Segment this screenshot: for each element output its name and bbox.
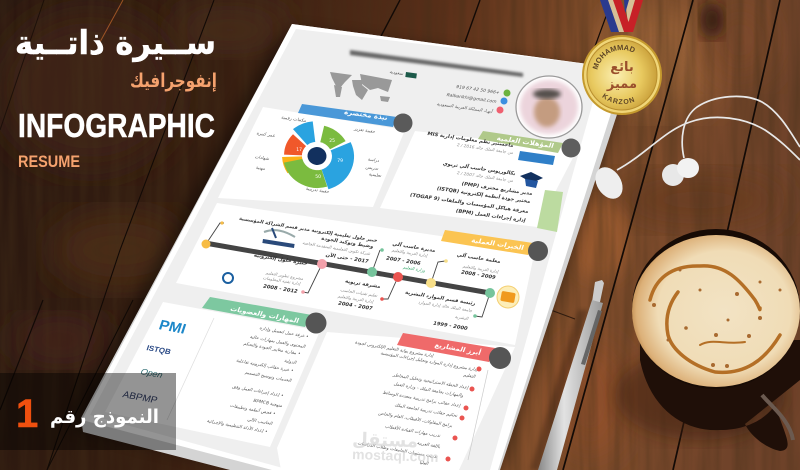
- contact rows: [436, 84, 510, 115]
- logo: ABPMP: ABPMP: [121, 390, 159, 406]
- donut labels: تدريس: [365, 165, 380, 172]
- project list: [354, 340, 478, 467]
- tab: certificates: [537, 190, 563, 232]
- donut labels: تعليمية: [368, 172, 383, 179]
- skills list: • إعداد الأدلة التنظيمية والإجرائية: [206, 417, 269, 435]
- watermark: مستقل: [352, 429, 418, 452]
- watermark: mostaql.com: [352, 446, 439, 465]
- panel: brief summary: 25: [329, 138, 335, 144]
- heading band: skills: [202, 297, 312, 327]
- project list: إدارة مشروع إدارة الموارد وتحليل إجراءات المؤسسة: [379, 351, 478, 373]
- project bullets: [446, 366, 488, 462]
- donut labels: عمر كبيرة: [256, 131, 277, 139]
- heading band: experience: [441, 230, 533, 255]
- panel: work experience: وضبط وتوكيد الجودة: [320, 236, 374, 250]
- panel: work experience: جامعة الملك خالد إدارة الموارد: [417, 300, 474, 314]
- pen: [530, 280, 604, 470]
- panel: brief summary: نبذة مختصرة: [343, 108, 389, 122]
- heading band: brief: [298, 104, 397, 127]
- panel: work experience: 2006 - 2007: [385, 256, 422, 267]
- medal: KARZON: [602, 93, 634, 104]
- contact rows: +966 50 42 67 919: [455, 84, 501, 96]
- panel: qualifications: معرفة هياكل المؤسسات والملفات (TOGAF 9): [409, 193, 529, 215]
- project list: إعداد الخطة الاستراتيجية وتحليل المخاطر: [391, 373, 469, 391]
- skills list: • إعداد إجراءات العمل وفق: [231, 385, 284, 399]
- panel: work experience: 2017 - حتى الآن: [325, 251, 371, 265]
- panel: work experience: الخبرات العملية: [470, 237, 525, 252]
- panel: qualifications: ماجستير نظم معلومات إدارية MIS: [426, 131, 514, 149]
- skills list: • خبرة حقائب إلكترونية تفاعلية: [235, 358, 295, 374]
- panel: qualifications: من جامعة الملك خالد 2007 / 2: [456, 170, 514, 183]
- skills list: المحتوى والعمل بمهارات عالية: [249, 335, 306, 350]
- project list: العليا: [418, 461, 429, 467]
- skills list: • غرفة عمل لتعميل وإدارة: [258, 326, 309, 340]
- panel: work experience: إدارة تقنية المعلومات: [262, 275, 301, 287]
- donut labels: شهادات: [254, 155, 270, 162]
- panel: work experience: [176, 203, 548, 345]
- timeline: [202, 221, 495, 318]
- panel: work experience: تعليم تقنيات الحاسب: [339, 287, 379, 299]
- panel: brief summary: [218, 104, 412, 207]
- project list: تدريب مستويات الجامعات وطلاب الدراسات: [356, 441, 439, 460]
- panel: work experience: خبير حلول تعليمية إلكترونية مدير قسم الشراكة المؤسسية: [238, 216, 379, 244]
- panel: work experience: خبيرة حلول إلكترونية: [253, 253, 309, 267]
- panel: brief summary: 79: [337, 158, 343, 164]
- medal: مميز: [606, 77, 637, 92]
- panel: skills: [105, 297, 326, 447]
- model number overlay: 1: [16, 392, 38, 436]
- location flag: [390, 71, 417, 78]
- paper shadow: [70, 30, 630, 470]
- donut labels: دراسة: [367, 158, 380, 164]
- name blurred: [350, 50, 523, 77]
- donut labels: حقيبة تدريبية: [305, 187, 330, 195]
- subtitle arabic: إنفوجرافيك: [130, 70, 217, 92]
- skills list: الخدمات وتوضيح التصميم: [244, 371, 292, 384]
- skills list: • فحص أنظمة وتطبيقات: [229, 402, 277, 417]
- panel: work experience: 2012 - 2008: [262, 284, 299, 295]
- title english: INFOGRAPHIC: [18, 107, 215, 144]
- panel: work experience: مشرفة تربوية: [344, 279, 381, 290]
- panel: qualifications: مدير مشاريع محترف (PMP): [461, 181, 533, 197]
- contact rows: أبهـا، المملكة العربية السعودية: [436, 101, 494, 115]
- world map: [330, 72, 392, 102]
- paper sheet stack: [81, 24, 630, 470]
- title arabic: ســيرة ذاتــية: [15, 23, 216, 63]
- heading band: projects: [397, 333, 495, 362]
- logo: tatweer: [223, 273, 233, 283]
- skills list: منهجية BPMCB: [252, 398, 284, 409]
- panel: skills: المهارات والعضويات: [229, 305, 300, 325]
- location flag: سعودية: [388, 70, 404, 77]
- skills list: الحاسب الآلي: [246, 417, 274, 427]
- skills list: الدولية: [283, 359, 297, 366]
- panel: qualifications: مختبر جودة أنظمة إلكترونية (ISTQB): [436, 185, 532, 205]
- panel: qualifications: المؤهلات العلمية: [496, 134, 555, 150]
- watermark: [353, 432, 438, 464]
- donut chart: [282, 121, 354, 190]
- panel: qualifications: إدارة إجراءات العمل (BPM): [455, 208, 526, 224]
- panel: qualifications: بكالوريوس حاسب آلي تربوي: [442, 160, 517, 177]
- panel: work experience: البشرية: [454, 314, 469, 321]
- paper sheet: [82, 24, 625, 470]
- model number overlay: النموذج رقم: [50, 406, 159, 428]
- logo: open group: Open: [139, 367, 164, 380]
- contact rows: Ralbarikhi@gmail.com: [445, 92, 498, 105]
- model number overlay: [0, 373, 176, 450]
- panel: projects: أبرز المشاريع: [434, 340, 482, 357]
- panel: work experience: 2007 - 2004: [337, 301, 374, 312]
- panel: projects: [277, 332, 515, 470]
- medal: بائع: [610, 60, 634, 75]
- project list: التعليم: [462, 373, 476, 380]
- donut labels: مهنية: [255, 166, 266, 172]
- ribbon: [600, 0, 643, 32]
- project list: باللغة العربية: [416, 441, 441, 450]
- project list: إعداد حقائب برامج تدريبية متعددة الوسائط: [382, 391, 461, 409]
- logo: ISTQB: ISTQB: [145, 344, 172, 356]
- panel: qualifications: [380, 131, 580, 232]
- panel: brief summary: 50: [315, 174, 321, 180]
- panel: work experience: شركة تكوين التعليمية المتقدمة الخاصة: [302, 240, 372, 256]
- project list: برامج المقاولات، الأقطاب، العام والخاص: [377, 410, 454, 429]
- coffee swirl: [650, 266, 780, 372]
- skills list: • مقارنة معايير الجودة والتحكم: [243, 341, 302, 357]
- skills list: [206, 326, 309, 435]
- project list: والمهارات بجامعة الملك - وزارة العمل: [393, 382, 464, 399]
- logo: PMI: PMI: [157, 318, 188, 337]
- earphones: [590, 96, 800, 204]
- panel: brief summary: 17: [296, 147, 302, 153]
- project list: تحكيم حقائب تدريبية لجامعة الملك: [394, 402, 459, 419]
- panel: work experience: معلمة حاسب آلي: [456, 251, 502, 265]
- university logo: [518, 151, 555, 165]
- panel: work experience: 2000 - 1999: [432, 321, 469, 332]
- panel: work experience: إدارة التربية والتعليم: [462, 264, 499, 275]
- panel: work experience: 2009 - 2008: [460, 270, 497, 281]
- panel: work experience: رئيسة قسم الموارد البشرية: [404, 290, 476, 307]
- project list: إدارة مشروع بوابة التعليم الإلكتروني لجودة: [354, 340, 435, 359]
- panel: work experience: إدارة التربية والتعليم: [337, 294, 374, 305]
- subtitle english: RESUME: [18, 152, 80, 171]
- panel: work experience: إدارة التربية والتعليم: [391, 248, 428, 259]
- profile photo: [516, 76, 582, 138]
- donut labels: مكتبات رقمية: [280, 115, 307, 124]
- panel: work experience: مديرة حاسب آلي: [391, 240, 437, 254]
- logo: company: [262, 228, 295, 248]
- medal: [582, 0, 662, 115]
- icon: briefcase: [497, 286, 519, 308]
- heading band: qualifications: [478, 131, 563, 153]
- coffee cup: [615, 229, 800, 451]
- project list: تدريب مهارات القيادة الأقطاب: [384, 423, 443, 439]
- medal: MOHAMMAD: [592, 44, 635, 70]
- panel: qualifications: من جامعة الملك خالد 2016 / 2: [456, 142, 514, 155]
- donut labels: حقيبة تعزيز: [352, 127, 376, 135]
- panel: work experience: وزارة التعليم: [402, 265, 426, 274]
- donut labels: [254, 115, 383, 195]
- icon: mortarboard: [520, 172, 543, 188]
- panel: work experience: مشروع تطوير التعليم: [265, 270, 304, 282]
